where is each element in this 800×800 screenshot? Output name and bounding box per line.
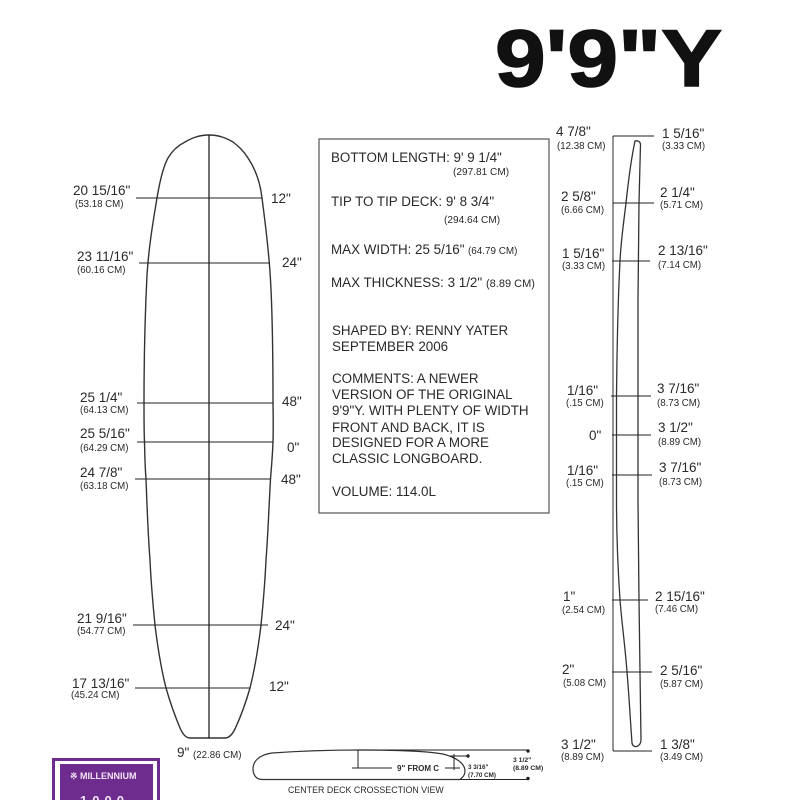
surfboard top outline with measurements — [71, 135, 302, 761]
rocker left labels: (5.08 CM) — [563, 678, 606, 689]
width labels: 9" — [177, 745, 190, 760]
station labels — [269, 191, 302, 694]
rocker right labels: 2 15/16" — [655, 589, 705, 604]
width labels: (53.18 CM) — [75, 199, 123, 210]
center deck crossection view: 3 3/16" — [468, 764, 489, 771]
rocker right labels: (5.87 CM) — [660, 679, 703, 690]
logo: Millennium badge: ※ MILLENNIUM — [70, 771, 137, 781]
panel: specifications: CLASSIC LONGBOARD. — [332, 451, 482, 466]
rocker left labels: 1 5/16" — [562, 246, 605, 261]
width labels: 25 5/16" — [80, 426, 130, 441]
width labels: (64.13 CM) — [80, 405, 128, 416]
title: 9'9"Y — [495, 14, 722, 104]
station labels: 12" — [271, 191, 291, 206]
panel: specifications: COMMENTS: A NEWER — [332, 371, 479, 386]
rocker left labels: 0" — [589, 428, 602, 443]
rocker station lines — [611, 136, 654, 751]
rocker right labels: (8.89 CM) — [658, 437, 701, 448]
rocker right labels: (3.49 CM) — [660, 752, 703, 763]
rocker right labels: 3 1/2" — [658, 420, 693, 435]
rocker right labels: (8.73 CM) — [659, 477, 702, 488]
rocker right labels: (7.46 CM) — [655, 604, 698, 615]
center deck crossection view: CENTER DECK CROSSECTION VIEW — [288, 785, 444, 795]
panel: specifications: (64.79 CM) — [468, 246, 517, 257]
width labels: 20 15/16" — [73, 183, 131, 198]
station labels: 48" — [282, 394, 302, 409]
rocker right labels: 2 5/16" — [660, 663, 703, 678]
rocker left labels: (6.66 CM) — [561, 205, 604, 216]
rocker right labels: 1 5/16" — [662, 126, 705, 141]
logo: Millennium badge — [52, 758, 160, 800]
rocker left labels: (2.54 CM) — [562, 605, 605, 616]
center deck crossection view: (7.70 CM) — [468, 772, 496, 779]
stringer — [208, 135, 210, 738]
width labels: (64.29 CM) — [80, 443, 128, 454]
rocker left labels: 2" — [562, 662, 575, 677]
rocker left labels — [556, 124, 606, 763]
rocker right labels: (3.33 CM) — [662, 141, 705, 152]
rocker profile with measurements — [556, 124, 708, 763]
panel: specifications: DESIGNED FOR A MORE — [332, 435, 489, 450]
rocker left labels: 1/16" — [567, 463, 598, 478]
center deck crossection view: (8.89 CM) — [513, 765, 543, 772]
width labels: 23 11/16" — [77, 249, 134, 264]
station labels: 48" — [281, 472, 301, 487]
rocker left labels: 1" — [563, 589, 576, 604]
rocker right labels: (7.14 CM) — [658, 260, 701, 271]
rocker left labels: (8.89 CM) — [561, 752, 604, 763]
panel: specifications: VOLUME: 114.0L — [332, 484, 436, 499]
center deck crossection view: 3 1/2" — [513, 757, 531, 764]
station labels: 0" — [287, 440, 300, 455]
rocker left labels: 4 7/8" — [556, 124, 591, 139]
panel: specifications: (294.64 CM) — [444, 215, 500, 226]
width labels: (45.24 CM) — [71, 690, 119, 701]
panel: specifications: MAX THICKNESS: 3 1/2" — [331, 275, 482, 290]
rocker right labels: (5.71 CM) — [660, 200, 703, 211]
panel: specifications: 9'9"Y. WITH PLENTY OF WIDTH — [332, 403, 529, 418]
width labels: (22.86 CM) — [193, 750, 241, 761]
dimension lines — [352, 750, 529, 780]
center deck crossection view: 9" FROM C — [397, 764, 439, 773]
rocker left labels: (.15 CM) — [566, 398, 604, 409]
center deck crossection view — [253, 750, 543, 795]
panel: specifications: (8.89 CM) — [486, 278, 535, 290]
rocker left labels: 1/16" — [567, 383, 598, 398]
rocker outline — [616, 141, 641, 747]
rocker left labels: 2 5/8" — [561, 189, 596, 204]
rocker right labels — [655, 126, 708, 763]
panel: specifications: SEPTEMBER 2006 — [332, 339, 448, 354]
width labels: 21 9/16" — [77, 611, 127, 626]
width labels: 24 7/8" — [80, 465, 123, 480]
width labels: 25 1/4" — [80, 390, 123, 405]
panel: specifications: VERSION OF THE ORIGINAL — [332, 387, 513, 402]
rocker right labels: 1 3/8" — [660, 737, 695, 752]
panel: specifications: TIP TO TIP DECK: 9' 8 3/4" — [331, 194, 494, 209]
rocker right labels: (8.73 CM) — [657, 398, 700, 409]
panel: specifications: BOTTOM LENGTH: 9' 9 1/4" — [331, 150, 502, 165]
station labels: 12" — [269, 679, 289, 694]
rocker right labels: 3 7/16" — [657, 381, 700, 396]
rocker left labels: (.15 CM) — [566, 478, 604, 489]
width labels: (60.16 CM) — [77, 265, 125, 276]
station labels: 24" — [282, 255, 302, 270]
rocker right labels: 2 1/4" — [660, 185, 695, 200]
width labels — [71, 183, 241, 761]
rocker left labels: 3 1/2" — [561, 737, 596, 752]
panel: specifications — [319, 139, 549, 513]
panel: specifications: FRONT AND BACK, IT IS — [332, 420, 485, 435]
crossection outline — [253, 750, 465, 780]
width labels: 17 13/16" — [72, 676, 130, 691]
panel: specifications: (297.81 CM) — [453, 167, 509, 178]
rocker left labels: (3.33 CM) — [562, 261, 605, 272]
rocker left labels: (12.38 CM) — [557, 141, 605, 152]
station lines — [133, 198, 273, 688]
baseline — [612, 136, 614, 751]
panel: specifications: SHAPED BY: RENNY YATER — [332, 323, 508, 338]
width labels: (54.77 CM) — [77, 626, 125, 637]
station labels: 24" — [275, 618, 295, 633]
board outline — [144, 135, 273, 738]
rocker right labels: 3 7/16" — [659, 460, 702, 475]
panel: specifications: MAX WIDTH: 25 5/16" — [331, 242, 465, 257]
width labels: (63.18 CM) — [80, 481, 128, 492]
rocker right labels: 2 13/16" — [658, 243, 708, 258]
